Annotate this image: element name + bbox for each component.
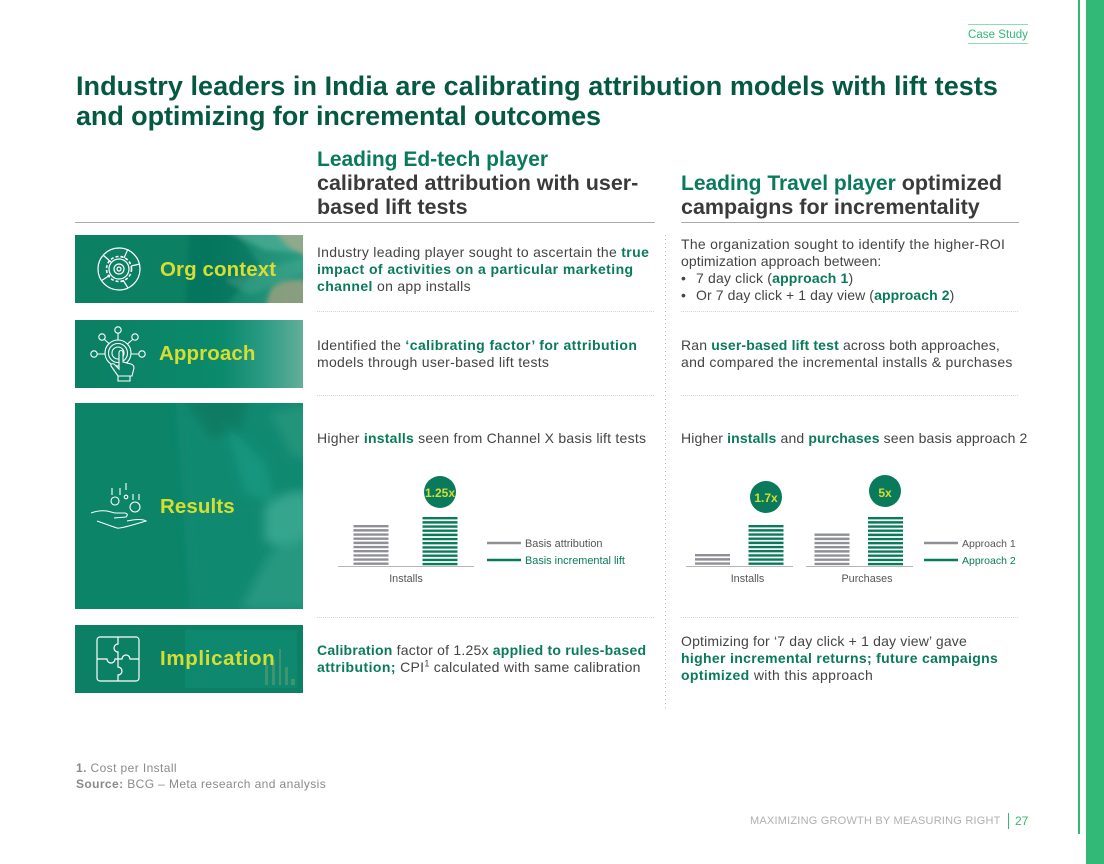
- icon: hand with coins: [90, 483, 148, 529]
- column heading: ed-tech: Leading Ed-tech player: [317, 148, 548, 171]
- page number: 27: [1015, 814, 1028, 828]
- bar: basis attribution: [354, 525, 388, 566]
- heading rule right: [681, 222, 1019, 223]
- text: org context travel: 7 day click (approach 1): [696, 270, 853, 286]
- footer text: MAXIMIZING GROWTH BY MEASURING RIGHT: [750, 815, 1001, 827]
- column heading: travel: Leading Travel player optimized: [681, 171, 1002, 195]
- legend: Approach 1: [962, 538, 1016, 550]
- bars: installs approach 2: [748, 525, 784, 566]
- panel: approach: [75, 320, 303, 388]
- badge: 1.7x: 1.7x: [754, 491, 778, 505]
- badge: 5x: 5x: [878, 486, 892, 500]
- text: results ed-tech: Higher installs seen from Channel X basis lift tests: [317, 430, 646, 446]
- tag: case study: Case Study: [968, 29, 1028, 41]
- text: org context ed-tech: [317, 244, 649, 294]
- badge: 5x: [869, 475, 901, 507]
- heading rule left: [75, 222, 655, 223]
- text: org context travel: •: [681, 287, 686, 303]
- axis label: purchases: Purchases: [841, 573, 893, 585]
- axis label: installs: Installs: [731, 573, 765, 585]
- footer divider: [1008, 813, 1009, 829]
- tag: case study: [968, 24, 1028, 44]
- column divider: [665, 235, 666, 709]
- text: implication ed-tech: attribution; CPI1 calculated with same calibration: [317, 658, 641, 675]
- text: approach travel: [681, 337, 1013, 370]
- text: org context travel: Or 7 day click + 1 day view (approach 2): [696, 287, 954, 303]
- text: implication travel: higher incremental returns; future campaigns: [681, 650, 998, 666]
- text: org context travel: [681, 236, 1005, 303]
- axis label: installs: Installs: [389, 573, 423, 585]
- text: implication ed-tech: Calibration factor of 1.25x applied to rules-based: [317, 642, 646, 658]
- text: org context ed-tech: impact of activities on a particular marketing: [317, 261, 634, 277]
- legend: Approach 2: [962, 555, 1016, 567]
- column heading: ed-tech: based lift tests: [317, 195, 468, 219]
- bars: purchases approach 2: [868, 517, 903, 566]
- text: org context travel: •: [681, 270, 686, 286]
- title: and optimizing for incremental outcomes: [76, 101, 601, 131]
- title: [76, 71, 998, 131]
- text: implication travel: Optimizing for ‘7 day click + 1 day view’ gave: [681, 633, 967, 649]
- bar: basis incremental lift: [422, 517, 458, 566]
- label: results: Results: [160, 495, 235, 518]
- icon: gear wheel: [97, 247, 141, 291]
- footnote: Source: BCG – Meta research and analysis: [76, 777, 326, 791]
- text: org context travel: The organization sought to identify the higher-ROI: [681, 236, 1005, 252]
- legend: [487, 538, 625, 567]
- chart: ed-tech installs: [338, 476, 625, 585]
- text: approach ed-tech: [317, 337, 637, 370]
- text: org context ed-tech: Industry leading player sought to ascertain the true: [317, 244, 649, 260]
- bars: purchases approach 1: [814, 534, 850, 566]
- legend: Basis attribution: [525, 538, 602, 550]
- text: approach ed-tech: models through user-based lift tests: [317, 354, 549, 370]
- panel: implication: [75, 625, 303, 693]
- footnote: 1. Cost per Install: [76, 761, 177, 775]
- legend: Basis incremental lift: [525, 555, 625, 567]
- label: approach: Approach: [159, 342, 255, 365]
- text: org context travel: optimization approach between:: [681, 253, 881, 269]
- bars: installs approach 1: [695, 554, 730, 566]
- panel: results: [75, 403, 303, 609]
- icon: touch hand: [90, 326, 146, 382]
- chart: travel installs and purchases: [686, 475, 1016, 585]
- side bar: thin line: [1078, 0, 1080, 834]
- footnote: [76, 761, 326, 791]
- text: implication ed-tech: [317, 642, 646, 675]
- label: implication: Implication: [160, 647, 275, 670]
- column heading: ed-tech: [317, 148, 638, 219]
- badge: 1.25x: 1.25x: [425, 486, 455, 500]
- icon: puzzle: [96, 636, 140, 682]
- column heading: travel: [681, 171, 1002, 219]
- text: implication travel: optimized with this approach: [681, 667, 873, 683]
- label: org context: Org context: [160, 258, 276, 281]
- title: Industry leaders in India are calibrating attribution models with lift tests: [76, 71, 998, 101]
- legend: [924, 538, 1016, 567]
- column heading: ed-tech: calibrated attribution with user-: [317, 171, 638, 195]
- text: approach travel: and compared the incremental installs & purchases: [681, 354, 1013, 370]
- text: implication travel: [681, 633, 998, 683]
- badge: 1.25x: [424, 476, 456, 508]
- side bar: green band: [1086, 0, 1104, 864]
- text: approach travel: Ran user-based lift test across both approaches,: [681, 337, 1000, 353]
- column heading: travel: campaigns for incrementality: [681, 195, 980, 219]
- panel: org context: [75, 235, 303, 303]
- text: approach ed-tech: Identified the ‘calibrating factor’ for attribution: [317, 337, 637, 353]
- text: org context ed-tech: channel on app installs: [317, 278, 471, 294]
- badge: 1.7x: [750, 481, 782, 513]
- text: results travel: Higher installs and purchases seen basis approach 2: [681, 430, 1028, 446]
